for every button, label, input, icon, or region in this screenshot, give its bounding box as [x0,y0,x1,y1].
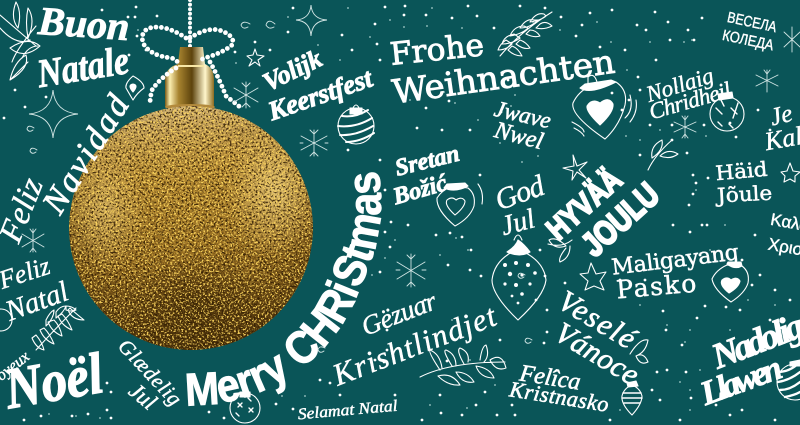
Haid Joule: Jõule [714,181,773,208]
icon: ornament left lower [0,309,12,331]
icon: leaf sprig by Joulu [648,140,678,170]
Maligayang Pasko: Pasko [615,269,697,304]
icon: star [247,49,264,66]
icon: leaf small left [10,55,28,80]
icon: heart ornament centre [572,75,636,139]
Selamat Natal: Selamat Natal [297,398,399,423]
icon: leaf branch top center [498,12,552,56]
Nollaig Chridheil: Chridheil [646,77,734,124]
Felica Kristnasko: Felîca [517,360,582,396]
Felica Kristnasko: Kristnasko [507,376,611,417]
Vesele Vanoce: Veselé [552,284,643,356]
icon: leaf sprig lower [548,239,572,262]
Gezuar Krishtlindjet: Krishtlindjet [327,298,502,393]
icon: star outline [563,155,587,180]
icon: snowflake center [396,254,426,287]
Nadolig Llawen: Llawen [695,349,787,413]
icon: four-point star [29,90,78,138]
icon: star right [781,163,800,182]
Kala greeting right edge [762,100,800,156]
Vesele Vanoce: Vánoce [549,316,645,392]
Jwave Nwel [491,96,553,155]
Merry Christmas: Merry CHRiStmas [186,172,382,406]
Feliz Natal: Natal [0,275,73,328]
Bulgarian greeting [721,9,778,54]
Sretan Bozic [389,141,462,211]
hanging bead string [188,0,192,48]
Sretan Bozic: Sretan [392,141,462,182]
icon: leaf by Vanoce [630,340,648,363]
Jwave Nwel: Nwel [491,117,546,155]
icon: star lower [580,263,606,290]
icon: striped drop ornament [622,381,642,415]
icon: heart ornament Bozic [437,183,482,226]
icon: snowflake top right [756,70,778,92]
icon: leaf garland [420,345,506,385]
Kala greeting right edge: Je [767,100,795,132]
Maligayang Pasko: Maligayang [610,240,740,281]
Hyvaa Joulu: JOULU [574,176,667,264]
Hyvaa Joulu [540,162,667,264]
glitter sphere [63,106,325,355]
icon: snowflake ornament right [710,92,744,131]
Feliz Navidad [0,88,137,249]
gold glitter bauble [63,0,325,355]
Bulgarian greeting: ВЕСЕЛА [726,9,778,36]
Haid Joule [714,157,773,208]
Sretan Bozic: Božić [389,170,451,211]
bauble cap [165,47,215,110]
Feliz Natal [0,251,73,328]
icon: striped ornament lower right [777,360,800,400]
icon: leaf branch lower left [32,306,84,350]
Frohe Weihnachten: Weihnachten [390,42,617,112]
icon: snowflake under Keerstfest [300,130,328,156]
bead bow [142,27,240,107]
icon: heart ornament Pasko [712,262,748,302]
Buon Natale: Natale [33,37,132,96]
Gezuar Krishtlindjet: Gëzuar [357,285,441,342]
Jwave Nwel: Jwave [492,96,553,133]
Volijk Keerstfest: Keerstfest [263,62,377,127]
icon: small four-point star top [296,5,327,36]
Nadolig Llawen [695,305,800,413]
God Jul: Jul [497,203,539,242]
icon: snowflake left lower [22,229,44,252]
icon: dotted drop ornament [492,235,546,320]
Buon Natale [33,0,132,96]
icon: striped ornament [338,105,374,144]
icon: leaf branch top left [0,2,40,62]
Hyvaa Joulu: HYVÄÄ [540,162,628,247]
Maligayang Pasko [610,240,740,304]
Frohe Weihnachten: Frohe [388,27,486,73]
icon: snowflake ornament bottom [230,390,260,423]
Volijk Keerstfest: Volijk [258,44,327,97]
icon: snowflake right [674,116,696,138]
God Jul [491,169,550,242]
icon: heart ornament small [126,76,144,100]
Feliz Navidad: Navidad [35,88,137,221]
Bulgarian greeting: КОЛЕДА [721,27,775,54]
icon: snowflake right edge [784,27,800,52]
Glaedelig Jul: Glædelig [113,334,187,410]
Haid Joule: Häid [714,157,769,185]
God Jul: God [491,169,550,217]
icon: spirals [27,21,532,352]
icon: snowflake near cap [234,82,258,108]
Joyeux Noel: Noël [0,340,108,421]
Nollaig Chridheil: Nollaig [642,63,716,107]
Greek greeting [767,210,800,261]
Glaedelig Jul: Jul [124,378,162,415]
